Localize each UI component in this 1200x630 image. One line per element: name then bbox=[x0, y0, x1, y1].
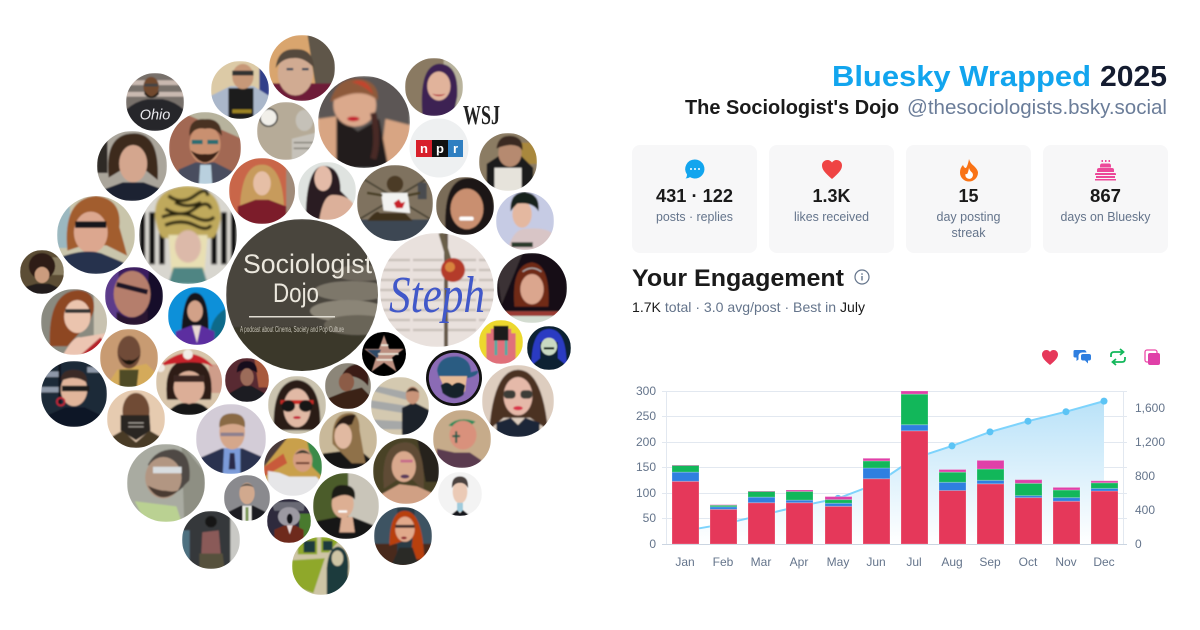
avatar: tiara auburn hair bbox=[497, 253, 567, 323]
cumulative area line bbox=[685, 398, 1108, 544]
right axis labels: 400 bbox=[1135, 503, 1155, 517]
avatar: bald bearded man yellow jacket bbox=[100, 329, 158, 387]
stacked monthly bars bbox=[672, 391, 1118, 544]
panel: days on Bluesky bbox=[1043, 145, 1168, 253]
bar and line chart bbox=[636, 384, 1165, 569]
icon: chat bubble bbox=[685, 159, 704, 178]
panel: likes received: likes received bbox=[794, 210, 869, 224]
avatar: man in museum bbox=[371, 377, 429, 435]
avatar: small suit man bbox=[224, 475, 270, 521]
avatar: clock and skeleton bbox=[257, 102, 315, 160]
panel: likes received: 1.3K bbox=[812, 186, 850, 206]
avatar: NPR logo: n bbox=[420, 141, 428, 156]
engagement summary: 1.7K total · 3.0 avg/post · Best in July bbox=[632, 299, 865, 315]
panel: day posting streak: streak bbox=[952, 226, 986, 240]
month labels: Jan bbox=[675, 555, 695, 569]
avatar: smiling woman black hair bbox=[436, 177, 494, 235]
avatar: blue hooded figure bbox=[527, 326, 571, 370]
left axis labels: 150 bbox=[636, 460, 656, 474]
avatar: small curly hair bbox=[20, 250, 64, 294]
avatar: Ohio shirt bbox=[126, 73, 184, 131]
icon: info bbox=[855, 270, 869, 284]
icon: quotes bbox=[1145, 350, 1160, 365]
avatar: NPR logo: p bbox=[436, 141, 444, 156]
display name and handle bbox=[685, 97, 1167, 119]
left axis labels: 300 bbox=[636, 384, 656, 398]
avatar: rainbow flag bbox=[264, 438, 322, 496]
icon: heart bbox=[822, 160, 842, 179]
avatar: NPR logo: r bbox=[453, 141, 458, 156]
avatar: painted face bbox=[433, 410, 491, 468]
avatar: purple hair bbox=[405, 58, 463, 116]
avatar: red sunglasses bbox=[268, 376, 326, 434]
avatar: santa hat headband bbox=[156, 349, 224, 415]
avatar: koala character bbox=[267, 499, 311, 543]
avatar: blue background purple blazer bbox=[168, 287, 226, 345]
avatar: red earrings bookshelves bbox=[41, 361, 107, 427]
panel: day posting streak: day posting bbox=[936, 210, 1001, 224]
avatar: cartoon man in suit bbox=[438, 472, 482, 516]
icon: flame bbox=[960, 159, 978, 182]
avatar: curly haired man bbox=[97, 131, 167, 201]
avatar: red lips and tattoos bbox=[318, 76, 410, 168]
panel: days on Bluesky: 867 bbox=[1090, 186, 1121, 206]
left axis labels: 250 bbox=[636, 409, 656, 423]
panel: day posting streak: 15 bbox=[958, 186, 978, 206]
avatar: Steph book and rose: Steph bbox=[389, 267, 485, 324]
left axis labels: 50 bbox=[643, 511, 656, 525]
month labels: Feb bbox=[713, 555, 734, 569]
avatar: green posterized woman bbox=[292, 537, 350, 595]
avatar: NPR logo bbox=[410, 118, 468, 178]
title: 2025 bbox=[1100, 61, 1167, 93]
avatar: The Sociologist's Dojo podcast logo bbox=[226, 219, 378, 371]
month labels: Aug bbox=[941, 555, 963, 569]
avatar: black tee and glasses bbox=[211, 61, 269, 119]
month labels bbox=[675, 555, 1115, 569]
icon: likes bbox=[1042, 350, 1058, 365]
display name and handle: @thesociologists.bsky.social bbox=[907, 97, 1167, 119]
panel: posts and replies bbox=[632, 145, 757, 253]
panel: day posting streak bbox=[906, 145, 1031, 253]
left axis labels: 100 bbox=[636, 486, 656, 500]
avatar: red wavy hair bbox=[41, 289, 109, 355]
avatar: pink eye makeup bbox=[373, 438, 439, 504]
left axis labels: 200 bbox=[636, 435, 656, 449]
heading: Your Engagement: Your Engagement bbox=[632, 265, 844, 292]
icon: reposts bbox=[1111, 349, 1125, 365]
avatar: crown illustration bbox=[139, 186, 237, 284]
month labels: Mar bbox=[751, 555, 771, 569]
chart legend bbox=[1042, 349, 1160, 365]
avatar: striped star bbox=[362, 332, 406, 376]
right axis labels: 0 bbox=[1135, 537, 1142, 551]
right axis labels: 800 bbox=[1135, 469, 1155, 483]
avatar: blonde ombre hair bbox=[319, 411, 377, 469]
month labels: May bbox=[827, 555, 849, 569]
month labels: Oct bbox=[1019, 555, 1038, 569]
avatar: bearded selfie bbox=[127, 444, 205, 522]
avatar: Steph book and rose bbox=[380, 233, 497, 347]
display name and handle: The Sociologist's Dojo bbox=[685, 97, 899, 119]
avatar: black mask bbox=[107, 390, 165, 448]
avatar: The Sociologist's Dojo podcast logo: A podcast about Cinema, Society and Pop Culture bbox=[240, 325, 344, 334]
panel: likes received bbox=[769, 145, 894, 253]
right axis labels bbox=[1135, 401, 1165, 551]
month labels: Apr bbox=[790, 555, 808, 569]
month labels: Nov bbox=[1055, 555, 1077, 569]
left axis labels bbox=[636, 384, 656, 551]
avatar: bearded man with teal glasses bbox=[169, 112, 241, 184]
logo: WSJ: WSJ bbox=[463, 100, 500, 130]
avatar: mirror selfie bbox=[182, 511, 240, 569]
avatar: yellow pink armchair bbox=[479, 320, 523, 364]
avatar: man with cat bbox=[269, 35, 335, 101]
avatar: dark long hair woman bbox=[298, 162, 356, 220]
avatar: man in navy suit bbox=[196, 404, 266, 474]
month labels: Sep bbox=[979, 555, 1001, 569]
avatar bubble cluster bbox=[20, 35, 571, 595]
avatar: The Sociologist's Dojo podcast logo: Sociologist bbox=[243, 249, 372, 279]
left axis labels: 0 bbox=[649, 537, 656, 551]
right axis labels: 1,200 bbox=[1135, 435, 1165, 449]
avatar: curly dark hair illustration bbox=[225, 358, 269, 402]
avatar: The Sociologist's Dojo podcast logo: Dojo bbox=[273, 278, 319, 308]
avatar: Ohio shirt: Ohio bbox=[140, 107, 170, 123]
panel: days on Bluesky: days on Bluesky bbox=[1060, 210, 1151, 224]
avatar: white tee cardigan bbox=[479, 133, 537, 191]
panel: posts and replies: posts · replies bbox=[656, 210, 733, 224]
icon: replies bbox=[1074, 350, 1091, 364]
avatar: red hair black glasses bbox=[57, 196, 135, 274]
month labels: Jul bbox=[906, 555, 922, 569]
avatar: cartoon beaver bbox=[357, 165, 433, 242]
avatar: smiling short dark hair bbox=[313, 473, 379, 539]
month labels: Jun bbox=[866, 555, 886, 569]
avatar: dark sunglasses long hair bbox=[482, 365, 554, 437]
avatar: purple lit glasses bbox=[105, 267, 163, 325]
title: Bluesky Wrapped bbox=[832, 61, 1091, 93]
avatar: orange long hair bbox=[374, 507, 432, 567]
panel: posts and replies: 431 · 122 bbox=[656, 186, 733, 206]
avatar: purple cartoon with cap bbox=[426, 350, 482, 406]
avatar: dark cap profile bbox=[325, 363, 371, 409]
icon: birthday cake bbox=[1095, 160, 1116, 180]
avatar: orange curtain blonde curls bbox=[229, 158, 297, 224]
right axis labels: 1,600 bbox=[1135, 401, 1165, 415]
avatar: green fringe bbox=[496, 192, 554, 250]
month labels: Dec bbox=[1093, 555, 1115, 569]
